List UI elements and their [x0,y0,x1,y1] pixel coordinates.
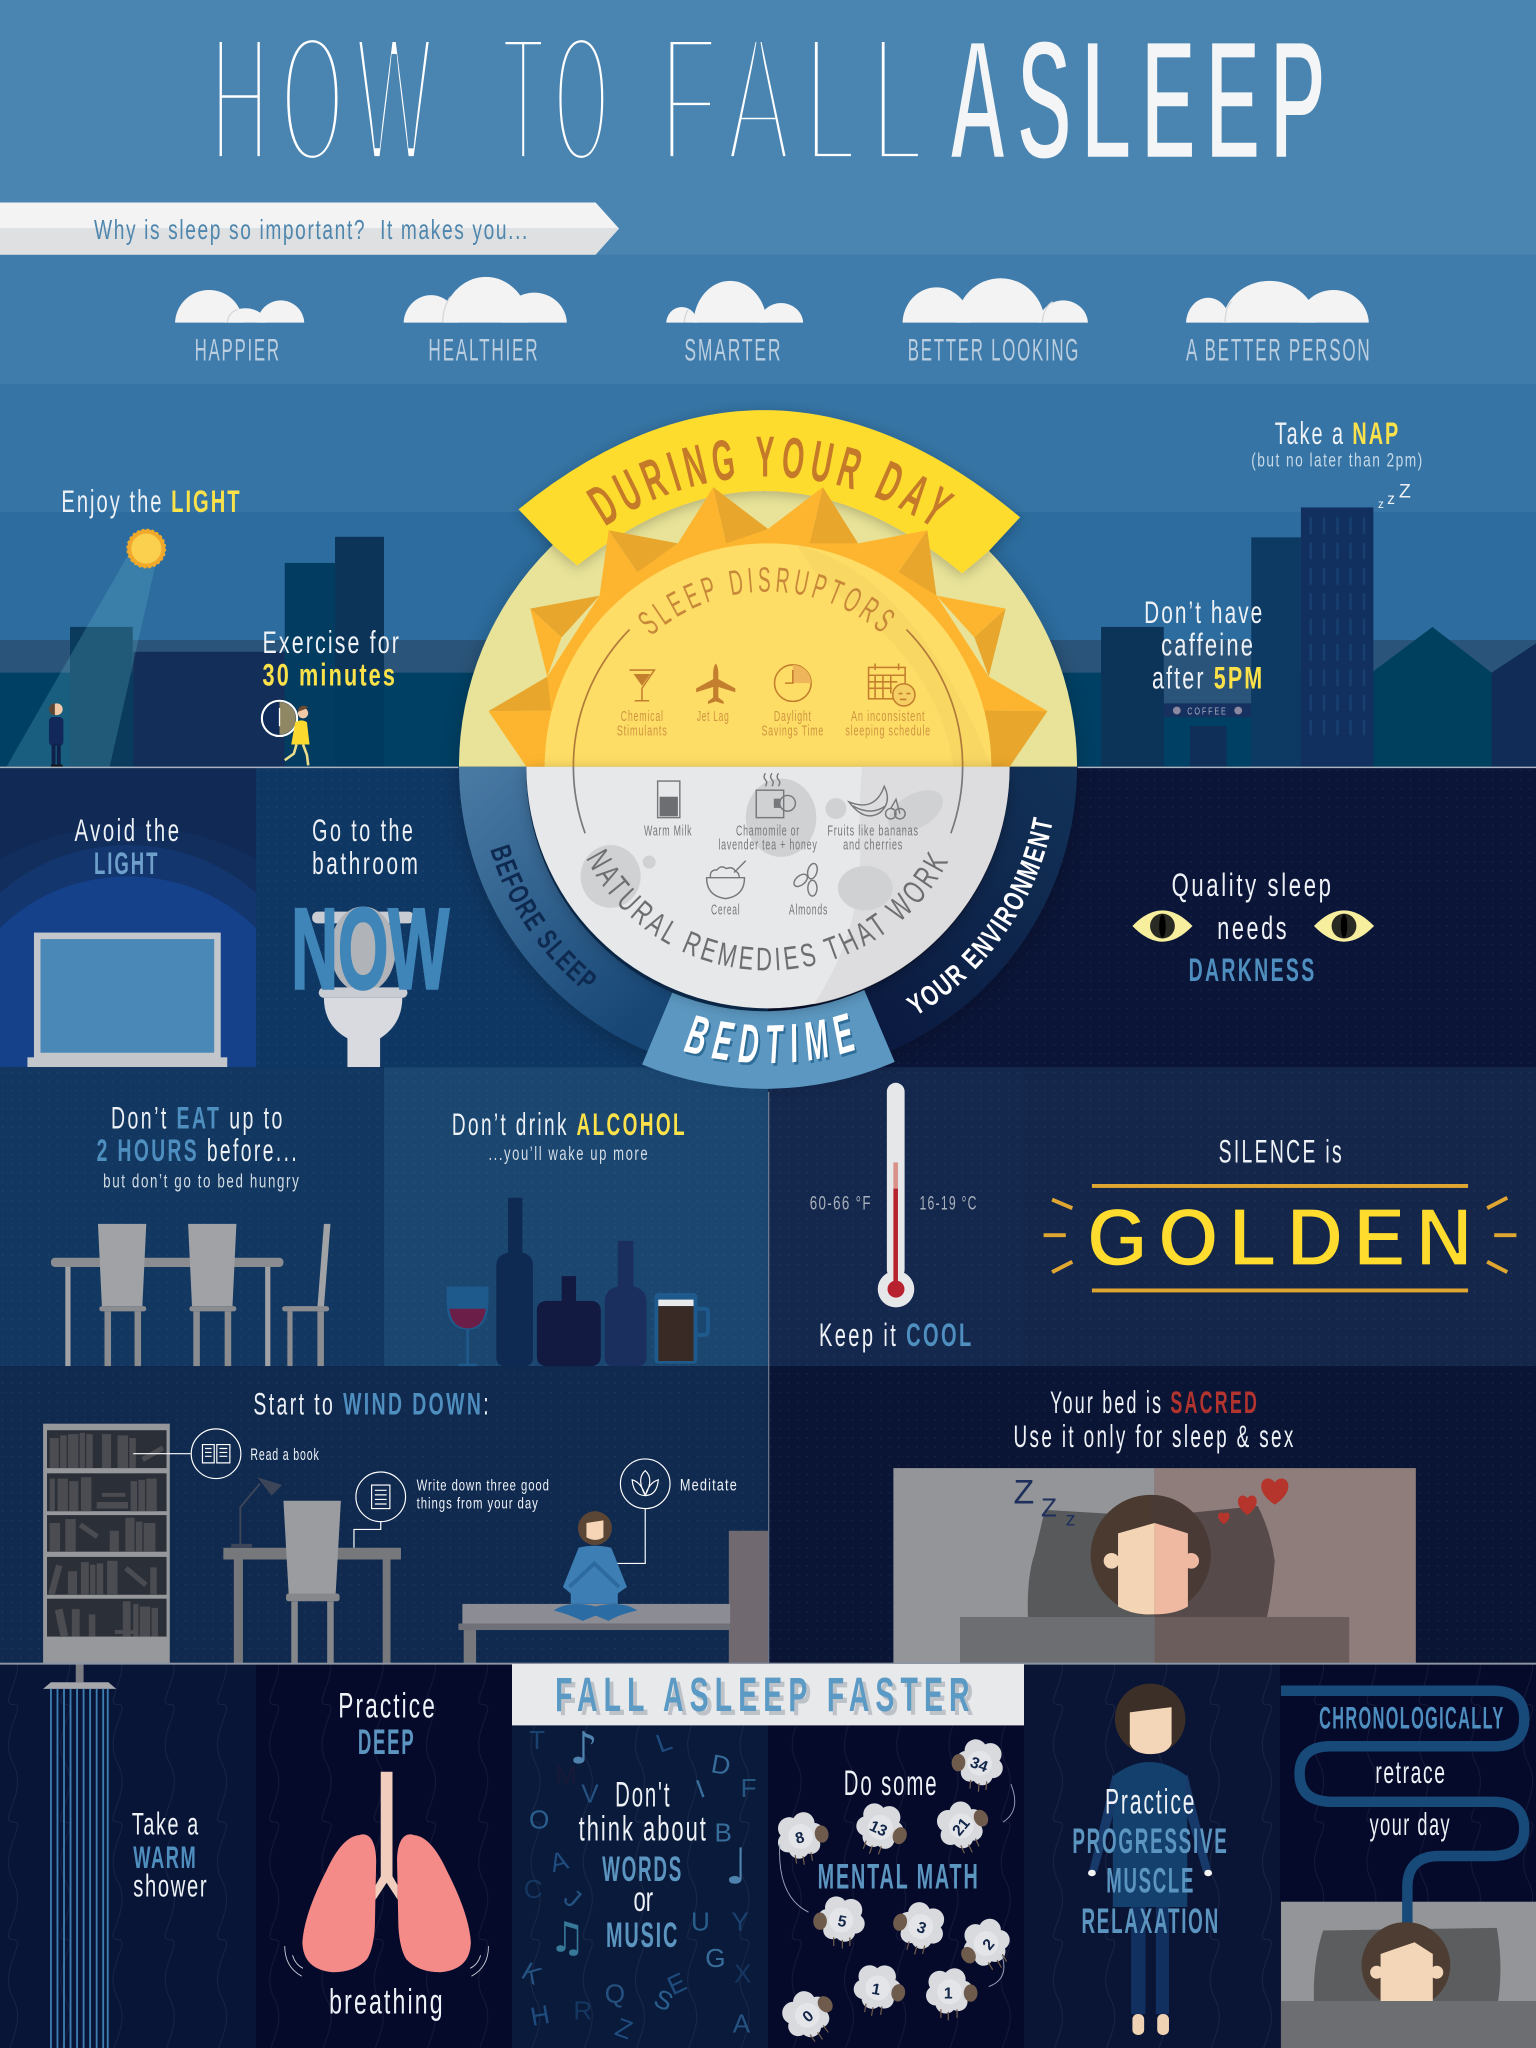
sleep disruptor labels: An inconsistent [851,708,925,725]
text: no caffeine: after 5PM [1152,660,1264,695]
curved label: bedtime [684,1013,857,1066]
icon: hearts [1218,1479,1288,1524]
sheep counting: 1 [944,1985,953,2002]
panel: don't drink alcohol [384,1067,768,1366]
curved label: bedtime: BEDTIME [684,1013,855,1064]
panel: don't think about words or music [512,1664,768,2048]
ring tab: bedtime [642,990,895,1089]
natural remedy labels: Chamomile or [736,822,800,839]
text: take a nap: (but no later than 2pm) [1251,449,1424,471]
sheep counting: 3 [914,1919,929,1938]
scattered letters and notes: K [517,1956,547,1991]
figure: meditating person [554,1511,637,1621]
figure: man looking up [49,703,63,767]
sky background bands [0,0,1536,767]
sleep disruptor labels: Stimulants [617,722,668,739]
icon: sun [127,530,165,568]
panel: mental math: MENTAL MATH [818,1858,980,1897]
icon: bananas and cherries [849,786,905,819]
panel: your bed is sacred [768,1366,1536,1664]
panel: don't eat [0,1067,384,1366]
panel: don't eat: Don’t EAT up to [111,1100,285,1135]
city: right skyline [1101,507,1536,767]
sun disc [459,458,1077,767]
clouds row [175,276,1369,323]
sleep disruptor labels [617,708,931,739]
panel: don't think about words or music: WORDS [602,1850,683,1889]
natural remedy labels: Almonds [789,901,828,918]
scattered letters and notes: A [733,2008,751,2038]
scattered letters and notes: M [555,1760,577,1790]
panel: avoid the light [0,768,256,1068]
scattered letters and notes: U [691,1906,710,1936]
panel: silence is golden: GOLDEN [1087,1193,1482,1284]
coffee shop [1164,703,1251,767]
panel: quality sleep needs darkness: Quality sleep [1172,866,1334,903]
sheep counting: 8 [793,1829,807,1848]
panel: your bed is sacred: Your bed is SACRED [1050,1385,1259,1420]
panel: warm shower [0,1664,256,2048]
ribbon: why is sleep important: Why is sleep so important? It makes you... [94,214,529,245]
scattered letters and notes: ♪ [569,1723,598,1774]
ground and divider lines [0,767,1536,1664]
curved label: during your day: DURING YOUR DAY [586,436,955,526]
icon: cat eyes [1132,910,1374,942]
text: no caffeine: Don’t have [1144,595,1264,630]
illustration: dining table [51,1224,330,1366]
panel: quality sleep needs darkness: DARKNESS [1189,951,1317,988]
natural remedy labels: Warm Milk [644,822,692,839]
text: no caffeine [1144,595,1264,695]
icon: zzz: Z [1041,1492,1057,1522]
icon: shower [43,1664,116,2048]
cloud labels: HEALTHIER [428,332,539,367]
text: take a nap: Take a NAP [1275,416,1400,451]
scattered letters and notes: I [692,1773,709,1804]
panel: keep it cool: 16-19 °C [920,1192,978,1214]
panel: deep breathing [256,1664,512,2048]
sheep counting: 34 [968,1754,990,1776]
panel: go to the bathroom: Go to the [312,813,415,848]
cloud labels: BETTER LOOKING [908,332,1080,367]
icon: glass of milk [658,781,680,818]
scattered letters and notes: D [709,1748,733,1781]
winding path [1281,1691,1524,1933]
scattered letters and notes: Z [611,2012,637,2045]
natural remedy labels: and cherries [843,837,903,854]
text: exercise for 30 minutes: Exercise for [263,625,401,660]
panel: keep it cool [768,1067,1024,1366]
scattered letters and notes: F [741,1773,757,1803]
scattered letters and notes: G [705,1943,726,1973]
scattered letters and notes: ♩ [725,1837,748,1895]
panel: deep breathing: breathing [329,1982,445,2021]
icon: calendar and sleepy face [869,664,915,706]
ribbon: why is sleep important [0,202,619,255]
sheep counting: 13 [867,1818,890,1841]
icon: zzz: Z [1399,481,1411,503]
icon: zzz: z [1378,498,1384,511]
panel: avoid the light: LIGHT [94,846,159,881]
curved label: before sleep: BEFORE SLEEP [490,844,596,986]
panel: start to wind down: Start to WIND DOWN: [253,1387,491,1422]
scattered letters and notes: J [558,1882,587,1914]
scattered letters and notes: A [547,1845,572,1878]
moon craters [581,767,1010,1004]
title: FALL [660,0,938,201]
sheep counting: 0 [800,2007,818,2026]
panel: silence is golden: SILENCE is [1219,1132,1344,1169]
text: exercise for 30 minutes: 30 minutes [263,658,397,693]
text: enjoy the light: Enjoy the LIGHT [61,484,242,519]
cloud labels: HAPPIER [195,332,281,367]
soft shadow [457,460,1079,1081]
panel: keep it cool: Keep it COOL [819,1316,974,1353]
icon: airplane [696,664,735,704]
panel: go to the bathroom [256,767,768,1067]
icon: martini [630,670,654,701]
scattered letters and notes: V [581,1778,599,1808]
icon: open book with label [133,1429,320,1479]
sleep disruptor labels: Daylight [774,708,812,725]
divider arc lines [573,630,963,833]
panel: don't drink alcohol: ...you’ll wake up more [488,1143,649,1165]
ring: your environment [864,767,1077,1051]
illustration: bench and headboard [458,1531,768,1664]
scattered letters and notes: Y [731,1906,749,1936]
illustration: desk and lamp [223,1477,401,1664]
sleep disruptor labels: Jet Lag [697,708,729,725]
sheep counting [773,1737,1021,2048]
scattered letters and notes: L [652,1726,676,1759]
scattered letters and notes: S [649,1983,678,2017]
scattered letters and notes: H [528,1999,552,2032]
icon: 30 minute clock and runner [262,701,310,765]
panel: progressive muscle relaxation [1024,1664,1280,2048]
panel: go to the bathroom: NOW [291,886,450,1014]
icon: zzz: z [1387,491,1395,508]
icon: lotus with label: Meditate [680,1475,738,1494]
icon: journal with label [354,1472,550,1548]
icon: cereal bowl [707,861,746,899]
text: take a nap [1251,416,1424,471]
city: left skyline [70,537,384,767]
panel: mental math: Do some [844,1764,938,1803]
icon: zzz: z [1066,1509,1076,1531]
scattered letters and notes: O [529,1805,549,1835]
curved label: your environment: YOUR ENVIRONMENT [906,816,1052,1014]
text: exercise for 30 minutes [263,625,401,693]
illustration: split bed with sleeper [893,1468,1416,1664]
panel: deep breathing: Practice [338,1687,437,1726]
curved label: sleep disruptors: SLEEP DISRUPTORS [638,567,894,634]
panel: progressive muscle relaxation: Practice [1105,1783,1196,1822]
title: HOW [210,0,444,201]
icon: journal with label: things from your day [417,1496,539,1513]
coffee shop: COFFEE [1187,706,1228,717]
light beam [7,555,155,767]
inner sun [545,543,991,767]
icon: open book with label: Read a book [250,1445,320,1464]
sleep disruptor labels: sleeping schedule [845,722,931,739]
panel: silence is golden [1024,1067,1536,1366]
central circle: sun and moon [456,408,1080,1089]
panel: avoid the light: Avoid the [74,813,182,848]
panel: retrace your day chronologically: retrace [1375,1755,1447,1790]
icon: zzz: Z [1014,1473,1034,1511]
natural remedy labels: Cereal [711,901,740,918]
illustration: sleeper in bed [1281,1922,1536,2048]
natural remedy labels: Fruits like bananas [827,822,919,839]
illustration: lungs [285,1772,488,1976]
ribbon: during your day [519,410,1020,573]
panel: warm shower: WARM [133,1840,197,1875]
icon: lotus with label [593,1459,738,1563]
scattered letters and notes: R [573,1995,592,2025]
panel: don't think about words or music: think about [579,1809,708,1848]
illustration: bookcase [43,1424,170,1664]
panel: progressive muscle relaxation: PROGRESSIVE [1072,1822,1229,1861]
panel: mental math [768,1664,1024,2048]
panel: retrace your day chronologically [1280,1664,1536,2048]
illustration: bottles and glasses [447,1198,708,1366]
text: no caffeine: caffeine [1161,628,1255,663]
panel: don't drink alcohol: Don’t drink ALCOHOL [452,1107,687,1142]
panel: warm shower: shower [133,1868,208,1903]
sheep counting: 1 [870,1981,882,1999]
moon disc [526,767,1010,1008]
natural remedy labels [644,822,919,918]
panel: go to the bathroom: bathroom [312,846,421,881]
banner: fall asleep faster: FALL ASLEEP FASTER [555,1668,976,1722]
panel: progressive muscle relaxation: MUSCLE [1106,1862,1195,1901]
panel: don't think about words or music: Don't [615,1775,671,1814]
icon: zzz [1378,481,1411,511]
sleep disruptor labels: Savings Time [761,722,824,739]
cloud labels: SMARTER [684,332,782,367]
scattered letters and notes: Q [605,1978,625,2008]
curved label: bedtime: BEDTIME [686,1016,857,1066]
scattered letters and notes: X [734,1959,751,1989]
panel: progressive muscle relaxation: RELAXATION [1081,1902,1220,1941]
scattered letters and notes: B [714,1818,732,1848]
scattered letters and notes: C [524,1874,543,1904]
panel: warm shower: Take a [132,1806,200,1841]
natural remedy labels: lavender tea + honey [718,837,818,854]
panel: quality sleep needs darkness [768,767,1536,1067]
scattered letters and notes: T [529,1725,545,1755]
panel: don't think about words or music: or [633,1880,653,1919]
scattered letters and notes: E [662,1966,691,2001]
icon: almonds [792,862,819,896]
banner: fall asleep faster: FALL ASLEEP FASTER [559,1672,980,1726]
panel: quality sleep needs darkness: needs [1217,909,1289,946]
panel: deep breathing: DEEP [358,1723,415,1762]
sun rays [488,487,1048,767]
sheep counting: 5 [836,1913,848,1931]
cloud labels [195,332,1371,367]
icon: thermometer [878,1083,914,1307]
title: TO [502,0,619,201]
panel: start to wind down [0,1366,768,1664]
panel: keep it cool: 60-66 °F [810,1192,872,1214]
figure: standing person [1088,1684,1212,2035]
cloud labels: A BETTER PERSON [1186,332,1371,367]
panel: don't eat: 2 HOURS before... [97,1133,299,1168]
icon: daylight savings clock [775,665,811,701]
banner: fall asleep faster [0,1663,1536,1726]
sleep disruptor labels: Chemical [621,708,664,725]
scattered letters and notes: ♫ [549,1912,586,1961]
panel: your bed is sacred: Use it only for sleep & sex [1014,1419,1296,1454]
ring: before sleep [459,767,672,1051]
panel: don't think about words or music: MUSIC [606,1916,679,1955]
panel: don't eat: but don’t go to bed hungry [103,1170,300,1192]
icon: tea mug [756,773,795,818]
icon: journal with label: Write down three good [417,1477,550,1494]
scattered letters and notes [517,1723,757,2045]
sheep counting: 2 [980,1936,998,1954]
title [210,0,1334,201]
curved label: natural remedies: NATURAL REMEDIES THAT WORK [586,848,948,970]
icon: zzz [1014,1473,1076,1531]
sheep counting: 21 [949,1815,974,1839]
panel: retrace your day chronologically: your day [1370,1807,1451,1842]
